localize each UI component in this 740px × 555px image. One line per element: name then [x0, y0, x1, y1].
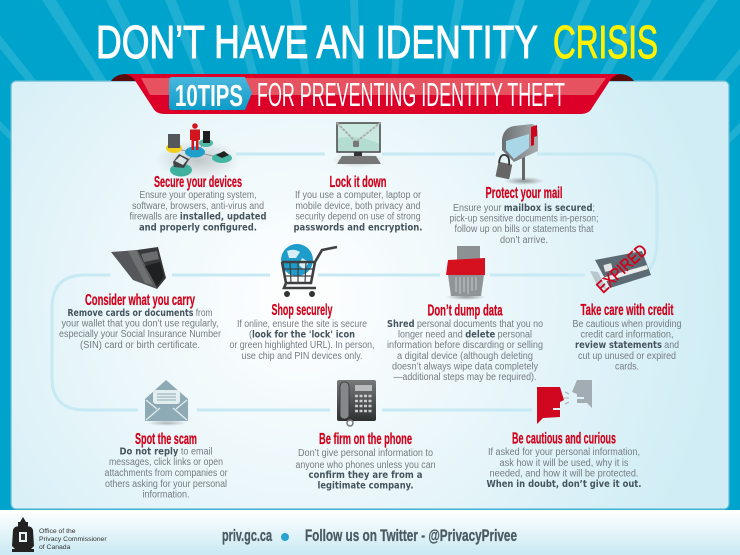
- tip: shop securely: or green highlighted URL). In person,: [230, 340, 374, 351]
- tip: protect your mail: don’t arrive.: [500, 235, 548, 246]
- path connecting tips: [52, 154, 657, 410]
- footer: [0, 510, 740, 555]
- tip: be firm on the phone: confirm they are from a: [308, 470, 422, 481]
- tip: shop securely: If online, ensure the site is secure: [237, 319, 367, 330]
- tip: lock it down: If you use a computer, laptop or: [295, 190, 422, 201]
- 10 tips tag: 10TIPS: [175, 78, 243, 113]
- website: priv.gc.ca: [222, 526, 272, 545]
- tip: shop securely: [230, 302, 374, 362]
- icon: open envelope: [145, 380, 188, 426]
- tip: shop securely: Shop securely: [272, 302, 333, 319]
- tip: consider what you carry: Consider what you carry: [85, 292, 195, 309]
- tip: be cautious and curious: If asked for your personal information,: [488, 447, 640, 458]
- organization name: of Canada: [39, 544, 71, 551]
- tip: shop securely: use chip and PIN devices only.: [242, 351, 362, 362]
- tip: take care with credit: credit card information,: [580, 330, 674, 340]
- icon: locked computer: [332, 123, 384, 168]
- tip: don't dump data: Shred personal documents that you no: [387, 319, 543, 330]
- tip: be firm on the phone: legitimate company.: [318, 480, 414, 492]
- tip: be cautious and curious: ask how it will be used, why it is: [500, 458, 628, 469]
- icon: shredder: [446, 246, 486, 300]
- tip: be firm on the phone: Don’t give personal information to: [298, 448, 433, 459]
- tip: protect your mail: follow up on bills or statements that: [454, 224, 594, 235]
- tip: lock it down: security depend on use of strong: [296, 212, 420, 222]
- tip: take care with credit: cards.: [615, 362, 639, 372]
- title: CRISIS: [553, 16, 658, 68]
- tip: don't dump data: Don’t dump data: [428, 302, 503, 320]
- banner: [111, 74, 634, 114]
- tip: spot the scam: Spot the scam: [135, 431, 197, 448]
- tip: protect your mail: Ensure your mailbox is secured;: [453, 203, 595, 214]
- organization name: [39, 528, 107, 551]
- tip: shop securely: (look for the 'lock' icon: [249, 330, 355, 340]
- tip: consider what you carry: especially your Social Insurance Number: [59, 329, 222, 340]
- icon: network of devices: [156, 123, 240, 180]
- title: DON’T HAVE AN IDENTITY: [96, 16, 538, 68]
- tip: be cautious and curious: [486, 430, 642, 490]
- icon: wallet: [111, 247, 166, 289]
- tip: don't dump data: longer need and delete personal: [398, 330, 532, 340]
- icon: mailbox with padlock: [495, 124, 544, 185]
- tip: don't dump data: information before discarding or selling: [387, 340, 543, 351]
- tip: take care with credit: cut up unused or expired: [578, 351, 676, 362]
- tip: lock it down: Lock it down: [330, 174, 386, 191]
- tip: don't dump data: doesn’t always wipe data completely: [392, 362, 538, 372]
- icon: desk telephone: [337, 380, 376, 426]
- tip: secure your devices: firewalls are installed, updated: [130, 212, 266, 222]
- icon: shopping cart with globe: [281, 244, 337, 297]
- tip: consider what you carry: your wallet that you don’t use regularly,: [62, 318, 218, 330]
- tip: take care with credit: Be cautious when providing: [572, 319, 682, 330]
- tip: spot the scam: [104, 431, 228, 500]
- tip: be cautious and curious: needed, and how it will be protected.: [490, 468, 638, 480]
- tip: don't dump data: a digital device (although deleting: [397, 351, 533, 362]
- tip: protect your mail: [450, 185, 598, 246]
- tip: spot the scam: others asking for your personal: [105, 479, 227, 490]
- tip: secure your devices: [130, 174, 266, 234]
- icon: globe: [281, 533, 289, 541]
- tip: secure your devices: and properly configured.: [139, 222, 257, 234]
- tip: be firm on the phone: anyone who phones unless you can: [296, 460, 436, 471]
- tip: protect your mail: pick-up sensitive documents in-person;: [450, 214, 598, 224]
- tip: spot the scam: messages, click links or open: [109, 457, 223, 468]
- tip: secure your devices: Secure your devices: [154, 174, 242, 191]
- tip: lock it down: mobile device, both privacy and: [296, 201, 420, 212]
- tip: take care with credit: Take care with credit: [580, 302, 674, 319]
- tip: consider what you carry: Remove cards or documents from: [68, 308, 212, 319]
- tip: be firm on the phone: [296, 431, 436, 492]
- twitter line: Follow us on Twitter - @PrivacyPrivee: [305, 526, 517, 545]
- icon: expired credit card: EXPIRED: [593, 241, 651, 297]
- organization name: Privacy Commissioner: [39, 536, 107, 543]
- tip: be cautious and curious: When in doubt, don’t give it out.: [486, 479, 642, 490]
- tip: consider what you carry: (SIN) card or birth certificate.: [80, 340, 200, 351]
- tip: consider what you carry: [59, 292, 222, 351]
- 10 tips tag: [169, 77, 252, 113]
- main panel: [11, 81, 729, 509]
- tip: lock it down: [294, 174, 422, 234]
- tip: be firm on the phone: Be firm on the phone: [319, 431, 412, 448]
- tip: spot the scam: information.: [142, 490, 190, 500]
- tip: don't dump data: —additional steps may be required).: [394, 372, 536, 383]
- tip: take care with credit: [572, 302, 682, 372]
- organization name: Office of the: [39, 528, 76, 535]
- tip: spot the scam: Do not reply to email: [120, 446, 212, 458]
- tip: protect your mail: Protect your mail: [486, 185, 562, 202]
- tip: take care with credit: review statements and: [575, 340, 679, 351]
- tip: be cautious and curious: Be cautious and curious: [512, 430, 616, 448]
- icon: coat of arms: [12, 517, 34, 552]
- tip: secure your devices: software, browsers, anti-virus and: [132, 201, 264, 212]
- tip: lock it down: passwords and encryption.: [294, 222, 422, 234]
- icon: two talking faces: [537, 380, 592, 424]
- tip: secure your devices: Ensure your operating system,: [140, 190, 256, 201]
- tip: don't dump data: [387, 302, 543, 383]
- tip: spot the scam: attachments from companies or: [104, 468, 228, 479]
